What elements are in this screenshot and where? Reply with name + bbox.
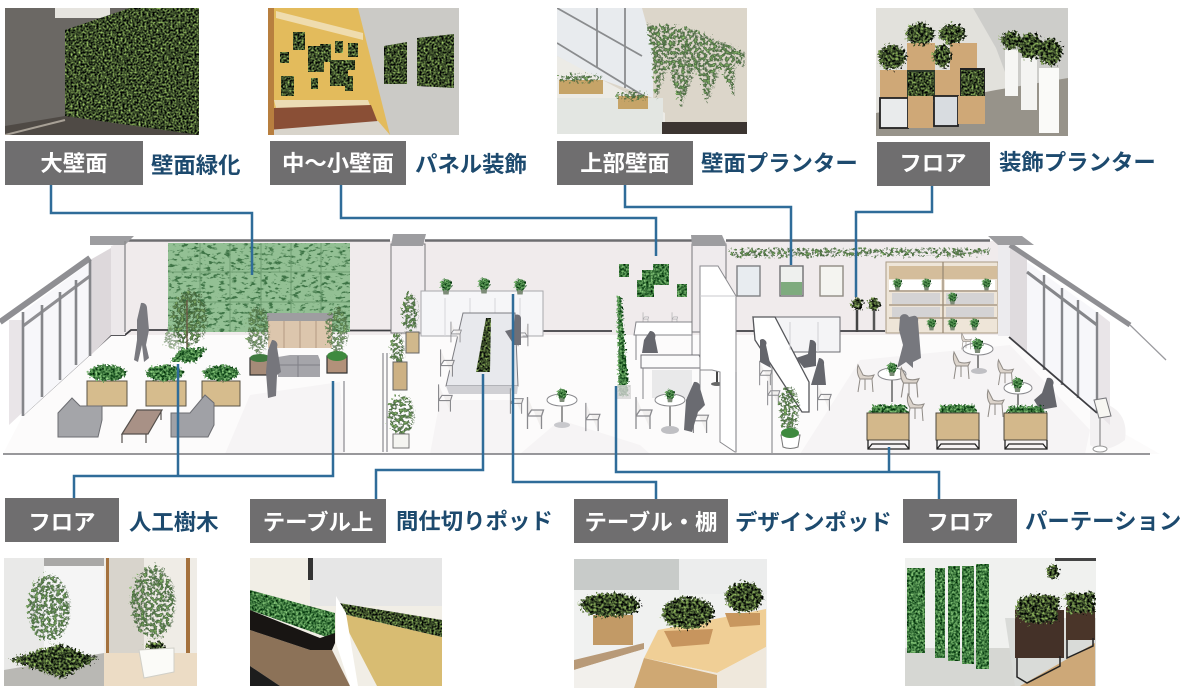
person counter left <box>760 339 771 368</box>
sofa left <box>58 398 102 437</box>
label text: パネル装飾: パネル装飾 <box>415 152 527 177</box>
photo: wall panels <box>268 8 459 135</box>
person upper <box>642 331 658 353</box>
label: テーブル上: テーブル上 <box>263 509 373 535</box>
round table <box>547 389 577 428</box>
cafe table 3 <box>1004 378 1032 405</box>
line: design pot <box>513 294 656 501</box>
cafe area <box>857 333 1057 421</box>
panel: floor plan sketch <box>0 234 1166 454</box>
wall frames <box>737 266 843 296</box>
partition planters <box>867 405 1047 449</box>
right window wall <box>988 236 1166 425</box>
photo: green wall <box>5 8 199 135</box>
person round table <box>684 382 705 432</box>
seated person <box>1034 378 1057 410</box>
plant tall 3 <box>389 396 415 448</box>
line: large wall <box>51 185 252 275</box>
table partition pot <box>476 318 491 372</box>
label: 上部壁面 <box>557 141 693 185</box>
plant tall 2 <box>391 333 407 390</box>
plant stands <box>851 298 880 332</box>
line: floor planter <box>856 186 932 297</box>
label text: 間仕切りポッド: 間仕切りポッド <box>396 509 553 534</box>
partition wall <box>344 353 387 452</box>
tree with ground cover <box>165 291 208 362</box>
photo: artificial trees <box>4 558 197 686</box>
skirting lines <box>23 330 885 415</box>
cafe chairs <box>857 333 1013 421</box>
walking people <box>897 314 921 368</box>
label: フロア right <box>903 499 1017 543</box>
person counter 2 <box>811 358 826 385</box>
photo: decorative planters <box>876 8 1068 136</box>
planter row <box>87 365 240 406</box>
meeting table <box>446 313 518 386</box>
label text: パーテーション: パーテーション <box>1025 509 1181 534</box>
line: small wall <box>341 185 656 256</box>
label text: 人工樹木: 人工樹木 <box>129 510 219 535</box>
plant tall 1 <box>403 294 419 353</box>
left window wall <box>0 236 134 425</box>
potted tree near counter <box>780 387 800 448</box>
bookshelf <box>886 262 998 333</box>
reception counter <box>753 317 840 412</box>
sign stand <box>1093 398 1111 452</box>
photo: partitions <box>905 558 1096 686</box>
cafe table 1 <box>878 363 906 402</box>
person: man <box>266 340 281 398</box>
label text: デザインポッド: デザインポッド <box>735 509 892 535</box>
label: 中〜小壁面 <box>270 141 406 185</box>
label: テーブル・棚: テーブル・棚 <box>584 509 718 535</box>
cube planter <box>880 43 985 128</box>
counter stools <box>760 361 831 411</box>
label: 大壁面: 大壁面 <box>40 151 108 176</box>
photo: wall planters <box>557 8 747 134</box>
table base <box>446 386 518 394</box>
lounge furniture <box>58 291 349 443</box>
label: 中〜小壁面: 中～小壁面 <box>282 151 394 176</box>
label: テーブル上 <box>250 499 386 543</box>
meeting chairs <box>439 322 528 414</box>
back wall <box>125 241 1010 336</box>
shelf pots <box>440 278 526 294</box>
pillar center <box>691 235 727 332</box>
label: フロア left: フロア <box>28 510 96 535</box>
line: artificial tree <box>74 364 333 500</box>
floor <box>3 335 1160 454</box>
photo: table partition pots <box>250 558 442 686</box>
label text: 装飾プランター: 装飾プランター <box>999 150 1156 175</box>
cafe table 2 <box>963 339 993 374</box>
white columns <box>1001 31 1062 133</box>
potted tree 1 <box>248 306 271 375</box>
wall planter vines <box>729 249 990 257</box>
person: woman <box>134 303 149 362</box>
cabinet <box>267 313 333 348</box>
pillar left <box>391 234 426 333</box>
label: 上部壁面: 上部壁面 <box>580 151 670 176</box>
chairs <box>636 397 708 433</box>
photo: design pots <box>574 559 767 688</box>
round table chairs <box>528 397 600 431</box>
line: table partition <box>376 374 483 501</box>
sofa right <box>171 395 214 437</box>
table lower <box>641 355 704 399</box>
center sofa <box>278 355 320 377</box>
connector lines <box>51 185 939 501</box>
cube foliage <box>878 23 965 69</box>
potted tree 2 <box>327 308 349 373</box>
wall top outlines <box>125 239 990 242</box>
round table center <box>655 390 685 434</box>
floor front edge <box>3 453 1150 455</box>
dining area <box>617 296 724 434</box>
plant stand center <box>708 345 724 386</box>
white storage <box>421 291 543 336</box>
line: partition <box>616 386 939 501</box>
label text: 壁面緑化: 壁面緑化 <box>151 153 241 178</box>
white wall panel <box>700 266 736 452</box>
label: 大壁面 <box>5 141 143 185</box>
label: フロア top: フロア <box>899 151 967 176</box>
coffee table <box>122 410 162 443</box>
meeting area <box>389 278 600 448</box>
label: フロア top <box>877 142 990 186</box>
person counter 1 <box>796 340 816 368</box>
center wall: panel decorations <box>619 264 687 297</box>
seated person <box>505 314 521 345</box>
white partition <box>736 347 772 454</box>
green wall panel <box>168 243 350 332</box>
line: upper wall <box>625 185 791 265</box>
table upper <box>634 312 692 360</box>
label: テーブル・棚 <box>574 499 728 543</box>
label: フロア left <box>5 498 119 542</box>
tall partition plant <box>617 296 631 399</box>
label: フロア right: フロア <box>926 510 994 535</box>
label text: 壁面プランター: 壁面プランター <box>701 151 858 176</box>
